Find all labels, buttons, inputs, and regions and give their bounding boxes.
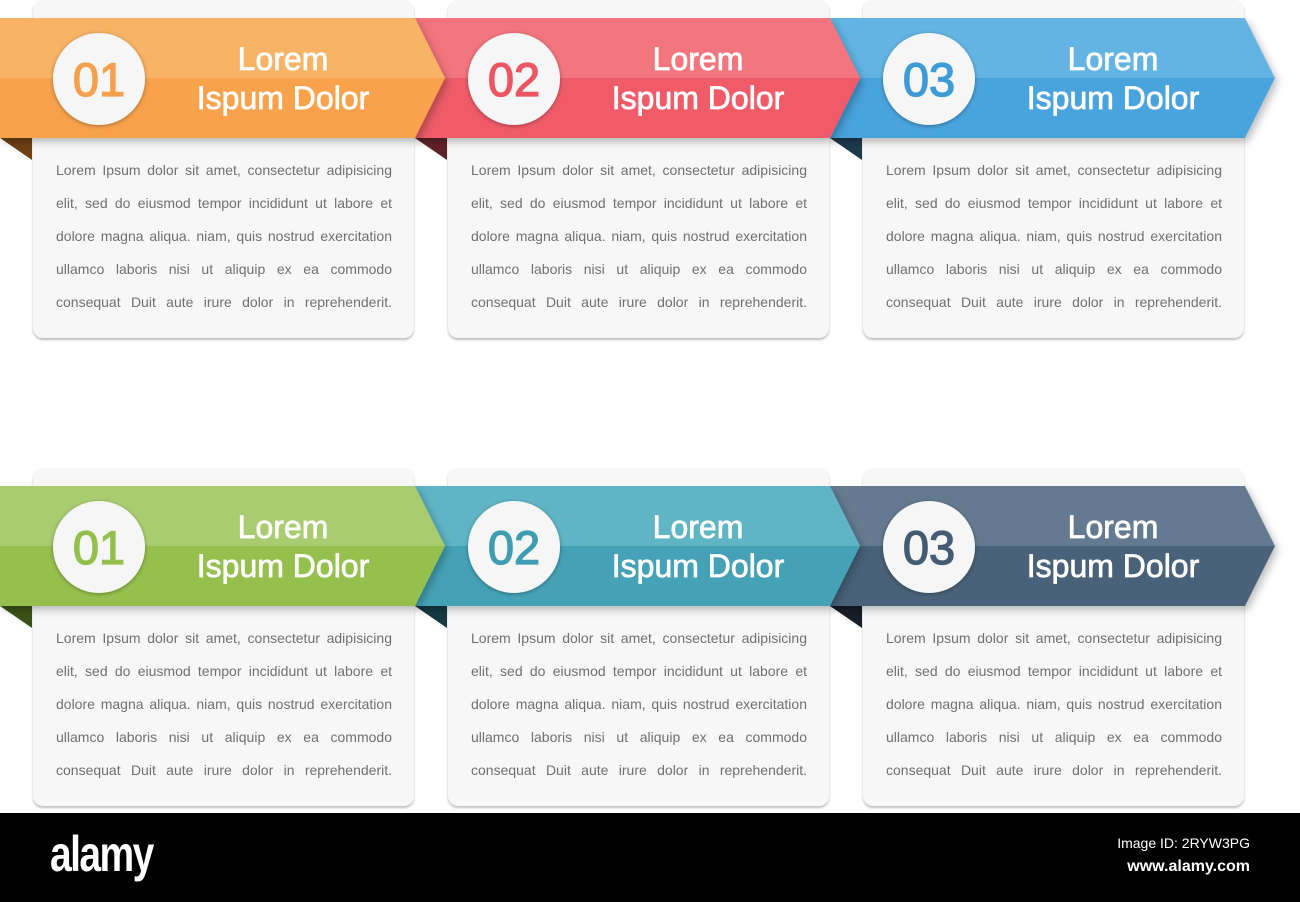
- banner: blue 03: 03: [903, 53, 955, 106]
- card: [448, 468, 829, 806]
- banner: slate 03: [830, 486, 1281, 628]
- banner: blue 03: Lorem: [1068, 41, 1158, 77]
- text block: Lorem Ipsum dolor sit amet, consectetur adipisicing elit, sed do eiusmod tempor incididunt ut labore et dolore magna aliqua. niam, quis nostrud exercitation ullamco laboris nisi ut aliquip ex ea commodo consequat Duit aute irure dolor in reprehenderit.: [56, 630, 392, 778]
- banner: orange 01: 01: [73, 53, 125, 106]
- banner: red 02: [415, 18, 866, 160]
- url text: www.alamy.com: [1127, 858, 1250, 875]
- text block: Lorem Ipsum dolor sit amet, consectetur adipisicing elit, sed do eiusmod tempor incididunt ut labore et dolore magna aliqua. niam, quis nostrud exercitation ullamco laboris nisi ut aliquip ex ea commodo consequat Duit aute irure dolor in reprehenderit.: [471, 162, 807, 310]
- banner: green 01: [0, 486, 450, 628]
- panel: row2 col2: [415, 473, 864, 809]
- text block: Lorem Ipsum dolor sit amet, consectetur adipisicing elit, sed do eiusmod tempor incididunt ut labore et dolore magna aliqua. niam, quis nostrud exercitation ullamco laboris nisi ut aliquip ex ea commodo consequat Duit aute irure dolor in reprehenderit.: [56, 162, 392, 310]
- banner: orange 01: Lorem: [238, 41, 328, 77]
- footer bar: [0, 813, 1300, 902]
- banner: slate 03: 03: [903, 521, 955, 574]
- banner: blue 03: [830, 18, 1281, 160]
- banner: orange 01: Ispum Dolor: [197, 80, 370, 116]
- card: [448, 0, 829, 338]
- card: [33, 0, 414, 338]
- logo: alamy: alamy: [50, 826, 153, 882]
- text block: Lorem Ipsum dolor sit amet, consectetur adipisicing elit, sed do eiusmod tempor incididunt ut labore et dolore magna aliqua. niam, quis nostrud exercitation ullamco laboris nisi ut aliquip ex ea commodo consequat Duit aute irure dolor in reprehenderit.: [886, 630, 1222, 778]
- panel: row2 col1: [0, 473, 450, 809]
- banner: slate 03: Ispum Dolor: [1027, 548, 1200, 584]
- banner: teal 02: Lorem: [653, 509, 743, 545]
- banner: green 01: 01: [73, 521, 125, 574]
- banner: teal 02: [415, 486, 864, 628]
- banner: blue 03: Ispum Dolor: [1027, 80, 1200, 116]
- banner: red 02: Ispum Dolor: [612, 80, 785, 116]
- banner: slate 03: Lorem: [1068, 509, 1158, 545]
- banner: teal 02: Ispum Dolor: [612, 548, 785, 584]
- banner: green 01: Lorem: [238, 509, 328, 545]
- banner: red 02: 02: [488, 53, 540, 106]
- banner: green 01: Ispum Dolor: [197, 548, 370, 584]
- card: [863, 0, 1244, 338]
- panel: row1 col2: [415, 5, 866, 341]
- panel: row1 col3: [830, 5, 1281, 341]
- banner: red 02: Lorem: [653, 41, 743, 77]
- panel: row2 col3: [830, 473, 1281, 809]
- image id text: Image ID: 2RYW3PG: [1117, 835, 1250, 851]
- text block: Lorem Ipsum dolor sit amet, consectetur adipisicing elit, sed do eiusmod tempor incididunt ut labore et dolore magna aliqua. niam, quis nostrud exercitation ullamco laboris nisi ut aliquip ex ea commodo consequat Duit aute irure dolor in reprehenderit.: [471, 630, 807, 778]
- banner: orange 01: [0, 18, 450, 160]
- panel: row1 col1: [0, 5, 450, 341]
- banner: teal 02: 02: [488, 521, 540, 574]
- card: [863, 468, 1244, 806]
- card: [33, 468, 414, 806]
- text block: Lorem Ipsum dolor sit amet, consectetur adipisicing elit, sed do eiusmod tempor incididunt ut labore et dolore magna aliqua. niam, quis nostrud exercitation ullamco laboris nisi ut aliquip ex ea commodo consequat Duit aute irure dolor in reprehenderit.: [886, 162, 1222, 310]
